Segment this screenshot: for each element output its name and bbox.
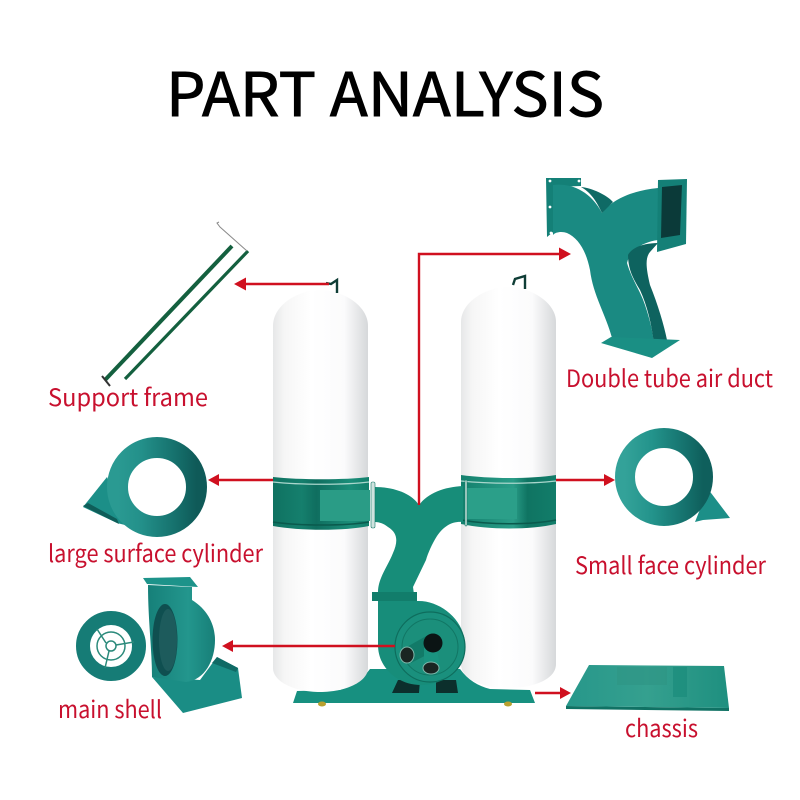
label: main shell: main shell <box>58 690 162 725</box>
right hook <box>513 276 525 289</box>
housing <box>143 577 242 713</box>
arrow: large surface cylinder <box>208 474 273 486</box>
arrow: chassis <box>535 687 571 699</box>
label: double tube air duct: Double tube air duct <box>566 359 773 394</box>
part: small face cylinder <box>625 438 730 522</box>
arrow: air duct <box>419 248 571 505</box>
label: large surface cylinder: large surface cylinder <box>48 534 264 569</box>
cover ring <box>83 618 139 674</box>
label: support frame: Support frame <box>48 378 208 413</box>
right green band <box>461 475 556 528</box>
arrow: support frame <box>234 278 329 290</box>
part: double tube air duct <box>546 178 687 358</box>
part: chassis <box>566 665 729 711</box>
dark base slots <box>392 680 458 693</box>
right filter bag <box>461 287 556 688</box>
blower inlets <box>400 634 442 674</box>
label: small face cylinder: Small face cylinder <box>575 546 767 581</box>
duct flanges <box>371 480 467 528</box>
title: PART ANALYSIS <box>166 47 604 134</box>
arrow: main shell <box>222 640 395 652</box>
left hook <box>326 280 337 293</box>
dust collector machine <box>273 276 556 706</box>
Y air duct <box>375 486 463 602</box>
left filter bag <box>273 290 368 692</box>
part: support frame <box>102 222 248 386</box>
base plate <box>293 669 535 703</box>
blower housing <box>378 601 465 685</box>
feet <box>318 702 512 706</box>
left green band <box>273 477 370 530</box>
blower flange <box>372 592 417 601</box>
part: main shell <box>83 577 242 713</box>
label: chassis: chassis <box>625 709 698 744</box>
arrow: small face cylinder <box>556 474 615 486</box>
blower cover <box>395 612 465 682</box>
part: large surface cylinder <box>83 448 196 526</box>
